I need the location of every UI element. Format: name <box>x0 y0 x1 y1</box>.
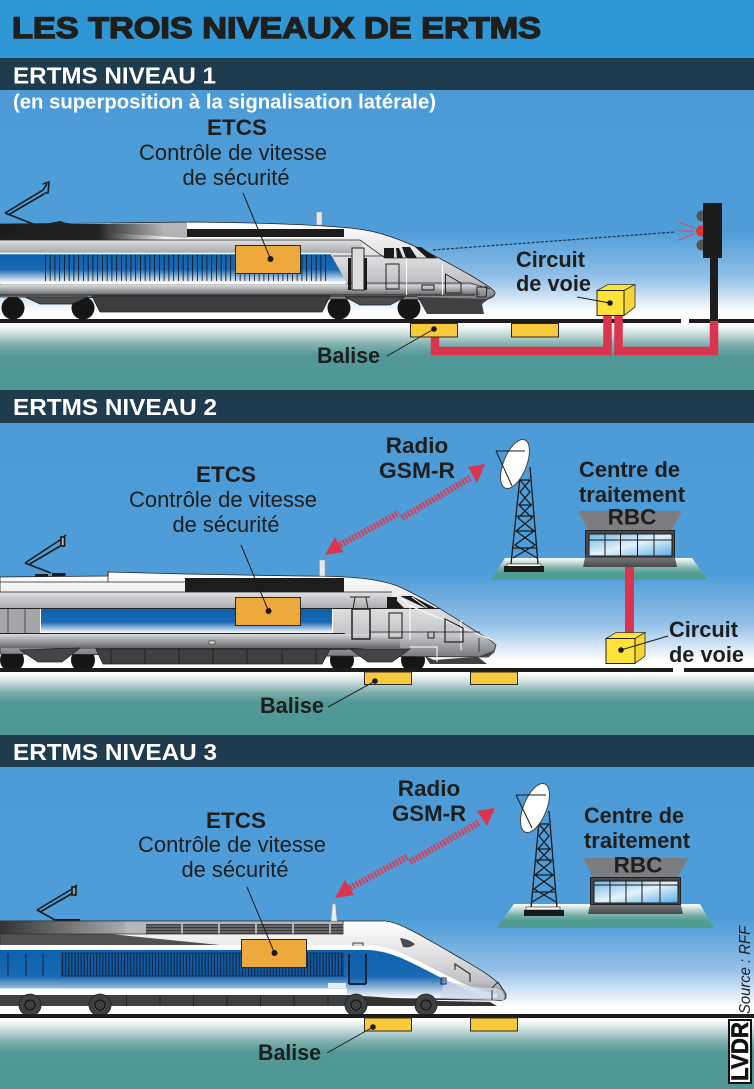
ETCS label: Contrôle de vitesse <box>129 487 317 512</box>
label: Centre de traitement RBC: traitement <box>579 482 685 507</box>
rail <box>0 1014 754 1018</box>
ETCS label: ETCS <box>196 462 256 487</box>
platform <box>496 904 714 928</box>
heading band: niveau 2 <box>0 390 754 423</box>
source credit: Source : RFF <box>737 925 754 1014</box>
ETCS label: ETCS <box>207 115 267 140</box>
logo: LVDR: LVDR <box>727 1022 754 1081</box>
heading band: niveau 1: ERTMS NIVEAU 1 <box>13 62 216 88</box>
platform <box>491 558 708 580</box>
red cables <box>435 316 714 351</box>
ETCS orange box <box>236 545 300 626</box>
label: Radio GSM-R: GSM-R <box>392 801 466 826</box>
train: niveau 2 <box>0 535 496 672</box>
balises <box>328 672 518 707</box>
radio arrow <box>335 808 495 898</box>
label: Circuit de voie <box>669 617 744 667</box>
label: Centre de traitement RBC <box>584 803 690 878</box>
label: Radio GSM-R: Radio <box>398 776 460 801</box>
red link <box>625 566 634 638</box>
title: LES TROIS NIVEAUX DE ERTMS <box>12 12 541 45</box>
heading band: niveau 2: ERTMS NIVEAU 2 <box>13 394 217 420</box>
label: Balise: Balise <box>260 693 324 718</box>
building: centre RBC <box>578 511 682 567</box>
label: Centre de traitement RBC: RBC <box>614 852 662 878</box>
ETCS label: de sécurité <box>172 512 280 537</box>
balises <box>327 1018 518 1053</box>
label: Circuit de voie <box>516 247 591 296</box>
ETCS label <box>138 808 326 882</box>
label: Circuit de voie: de voie <box>516 271 591 296</box>
label: Radio GSM-R <box>392 776 466 826</box>
radio tower and dish <box>515 780 564 916</box>
label: Radio GSM-R: Radio <box>386 433 448 458</box>
radio arrow <box>325 464 485 555</box>
label: Radio GSM-R: GSM-R <box>379 458 455 483</box>
label: Centre de traitement RBC: Centre de <box>584 803 684 828</box>
label: Circuit de voie: Circuit <box>669 617 738 642</box>
train: niveau 1 <box>0 182 495 320</box>
rail <box>0 319 754 323</box>
ETCS label <box>139 115 327 190</box>
rail <box>0 668 754 672</box>
yellow box: circuit de voie <box>577 284 635 316</box>
ETCS label: Contrôle de vitesse <box>139 140 327 165</box>
label: Radio GSM-R <box>379 433 455 483</box>
yellow box: circuit de voie <box>606 632 668 664</box>
label: Circuit de voie: Circuit <box>516 247 585 272</box>
signal light <box>678 203 722 320</box>
label: Centre de traitement RBC: RBC <box>608 504 656 530</box>
label: Centre de traitement RBC: Centre de <box>579 457 680 482</box>
ETCS label: de sécurité <box>182 165 290 190</box>
building: centre RBC <box>583 858 688 914</box>
subtitle: (en superposition à la signalisation latérale) <box>13 92 436 114</box>
ETCS label: ETCS <box>206 808 266 833</box>
label: Centre de traitement RBC <box>579 457 685 530</box>
title banner <box>0 0 754 58</box>
heading band: niveau 1 <box>0 58 754 90</box>
heading band: niveau 3 <box>0 735 754 767</box>
heading band: niveau 3: ERTMS NIVEAU 3 <box>13 739 217 765</box>
panel: ERTMS niveau 3 <box>0 735 754 1089</box>
ETCS orange box <box>236 193 300 274</box>
panel: ERTMS niveau 2 <box>0 390 754 735</box>
label: Balise: Balise <box>317 343 380 368</box>
label: Balise: Balise <box>258 1040 321 1065</box>
panel: ERTMS niveau 1 <box>0 58 754 390</box>
ETCS label <box>129 462 317 537</box>
radio tower and dish <box>495 436 544 572</box>
balises <box>387 324 558 356</box>
train: niveau 3 <box>0 885 506 1016</box>
label: Circuit de voie: de voie <box>669 642 744 667</box>
label: Centre de traitement RBC: traitement <box>584 828 690 853</box>
ETCS orange box <box>242 887 306 968</box>
ETCS label: de sécurité <box>182 857 288 882</box>
line of sight dashed <box>433 232 675 250</box>
ETCS label: Contrôle de vitesse <box>138 832 326 857</box>
